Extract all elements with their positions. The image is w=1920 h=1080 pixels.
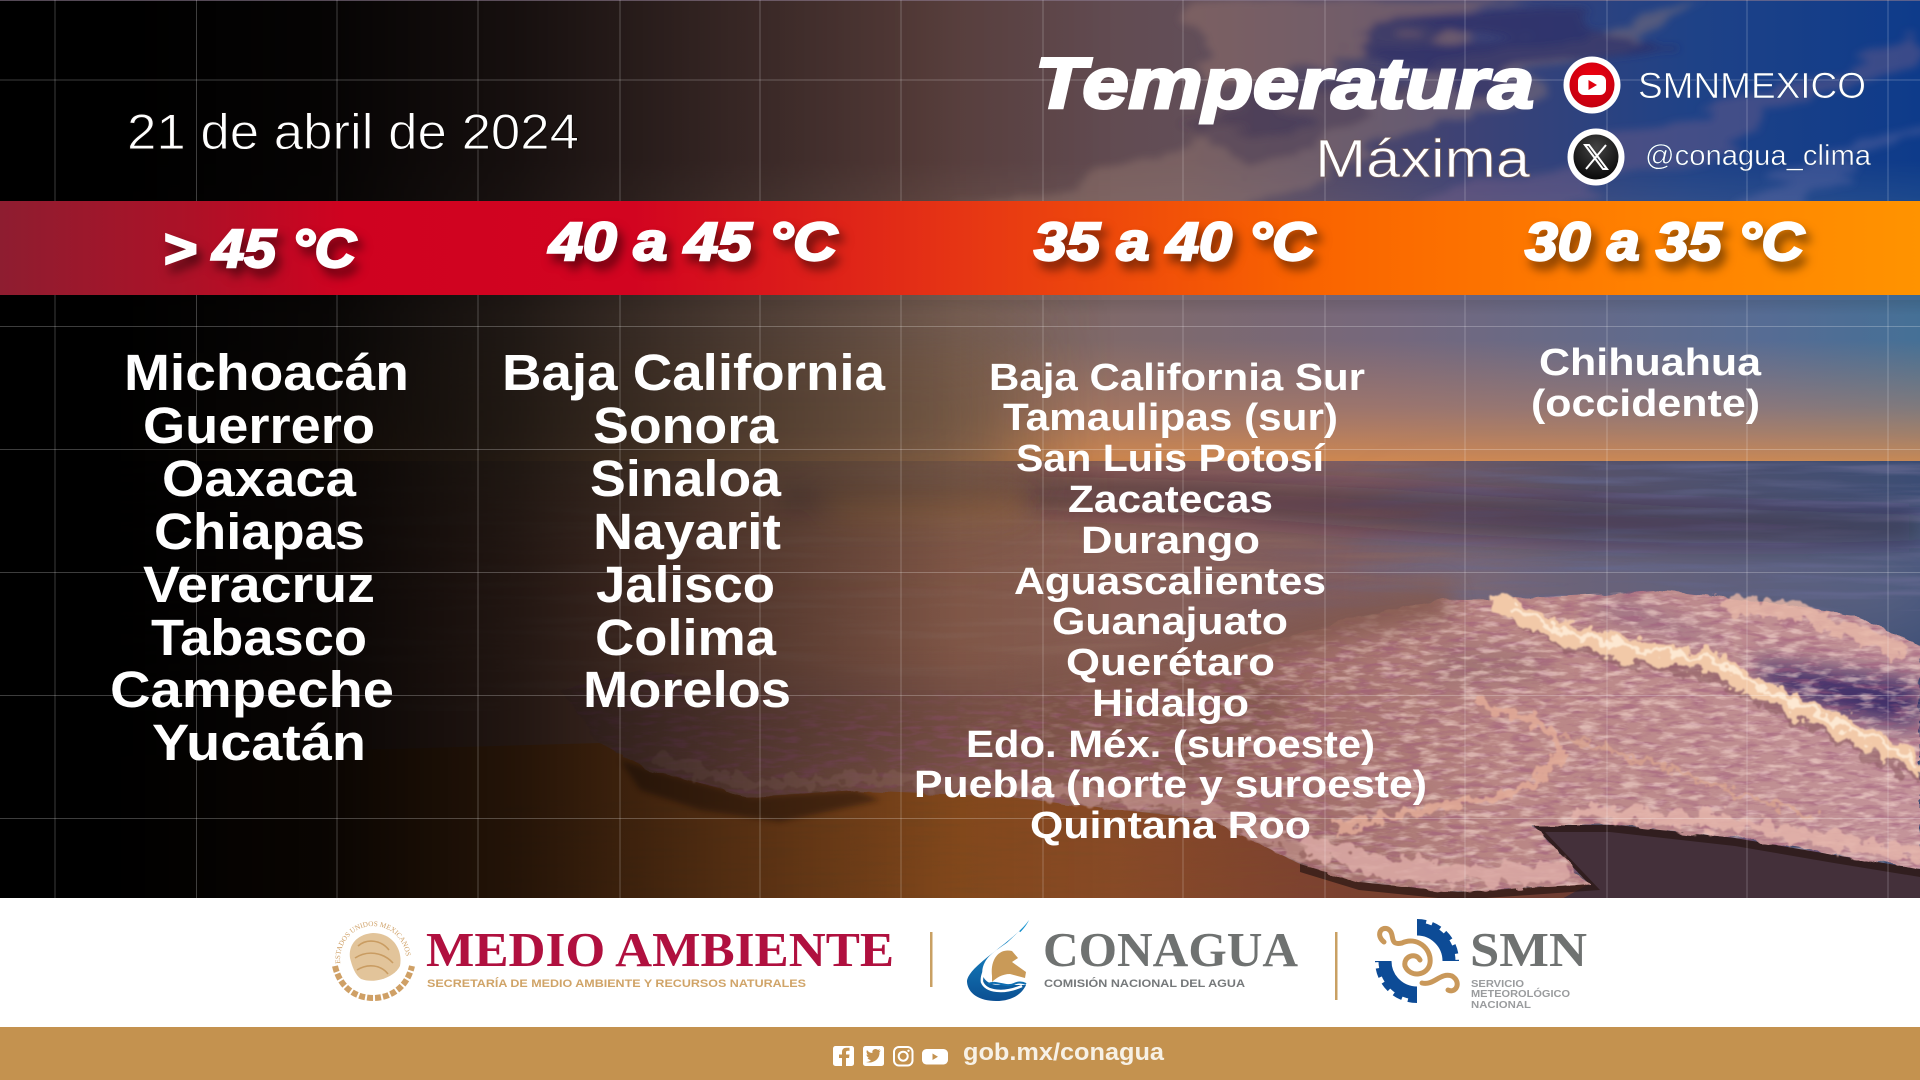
logo text: SMN: SMN bbox=[1470, 922, 1587, 977]
band label: above 45: > 45 °C bbox=[163, 219, 357, 279]
band label: 30 to 35: 30 a 35 °C bbox=[1525, 212, 1805, 272]
date: 21 de abril de 2024 bbox=[127, 104, 579, 160]
temperature band bbox=[0, 201, 1920, 295]
list: 35 to 40: Puebla (norte y suroeste) bbox=[914, 764, 1427, 806]
list: 30 to 35 bbox=[1531, 342, 1762, 425]
list: 35 to 40: Querétaro bbox=[1066, 642, 1275, 684]
list: 40 to 45: Jalisco bbox=[596, 556, 775, 613]
list: above 45: Guerrero bbox=[143, 397, 375, 454]
social: YouTube bbox=[1564, 56, 1866, 114]
website: gob.mx/conagua bbox=[963, 1039, 1165, 1066]
list: 40 to 45: Colima bbox=[595, 609, 777, 666]
list: 35 to 40: Guanajuato bbox=[1052, 601, 1288, 643]
social: X: @conagua_clima bbox=[1645, 140, 1872, 172]
sand and wet shore bbox=[0, 743, 1920, 900]
icon: facebook bbox=[833, 1046, 854, 1066]
list: 35 to 40: San Luis Potosí bbox=[1016, 438, 1326, 480]
list: 35 to 40 bbox=[914, 357, 1427, 847]
icon: twitter bbox=[863, 1046, 884, 1066]
list: 35 to 40: Tamaulipas (sur) bbox=[1003, 397, 1338, 439]
list: above 45: Veracruz bbox=[143, 556, 375, 613]
social: X bbox=[1568, 128, 1872, 186]
footer: gold bar bbox=[0, 1027, 1920, 1080]
list: above 45: Chiapas bbox=[154, 503, 365, 560]
list: 35 to 40: Zacatecas bbox=[1068, 479, 1273, 521]
logo text: SMN bbox=[1470, 922, 1587, 1011]
list: 35 to 40: Durango bbox=[1081, 520, 1260, 562]
list: above 45: Yucatán bbox=[152, 714, 366, 771]
foam bbox=[560, 590, 1920, 892]
logo: SMN gear and spiral bbox=[1378, 922, 1457, 1000]
list: 40 to 45: Baja California bbox=[502, 344, 886, 401]
list: 30 to 35: Chihuahua bbox=[1539, 342, 1762, 384]
footer: logo strip bbox=[0, 898, 1920, 1027]
list: 40 to 45: Sinaloa bbox=[590, 450, 782, 507]
logo: national seal: ESTADOS UNIDOS MEXICANOS bbox=[335, 921, 411, 964]
icon: youtube bbox=[922, 1049, 948, 1064]
social: YouTube: SMNMEXICO bbox=[1638, 65, 1866, 106]
list: above 45: Tabasco bbox=[151, 609, 367, 666]
band label: 35 to 40: 35 a 40 °C bbox=[1034, 212, 1316, 272]
logo text: SMN: SERVICIO bbox=[1471, 978, 1524, 990]
logo: national seal bbox=[332, 921, 415, 1001]
list: above 45 bbox=[110, 344, 409, 771]
list: 35 to 40: Edo. Méx. (suroeste) bbox=[966, 724, 1375, 766]
horizon haze on the left bbox=[380, 330, 1020, 500]
logo text: Medio Ambiente: MEDIO AMBIENTE bbox=[426, 922, 894, 977]
list: 35 to 40: Hidalgo bbox=[1092, 683, 1249, 725]
list: 35 to 40: Baja California Sur bbox=[989, 357, 1365, 399]
logo text: Conagua: COMISIÓN NACIONAL DEL AGUA bbox=[1044, 977, 1245, 990]
title: Temperatura Máxima: Temperatura bbox=[1035, 45, 1534, 124]
list: above 45: Michoacán bbox=[124, 344, 409, 401]
list: above 45: Oaxaca bbox=[162, 450, 357, 507]
logo text: SMN: METEOROLÓGICO bbox=[1471, 987, 1570, 1000]
rolling wave band at the horizon bbox=[780, 476, 1920, 543]
list: 40 to 45: Sonora bbox=[593, 397, 779, 454]
title: Temperatura Máxima: Máxima bbox=[1315, 129, 1531, 189]
list: 40 to 45 bbox=[502, 344, 886, 718]
logo text: Conagua: CONAGUA bbox=[1043, 922, 1299, 977]
list: above 45: Campeche bbox=[110, 661, 394, 718]
list: 40 to 45: Morelos bbox=[583, 661, 791, 718]
band label: 40 to 45: 40 a 45 °C bbox=[548, 212, 838, 272]
list: 35 to 40: Aguascalientes bbox=[1014, 561, 1326, 603]
list: 35 to 40: Quintana Roo bbox=[1030, 805, 1311, 847]
logo text: SMN: NACIONAL bbox=[1471, 999, 1532, 1011]
list: 40 to 45: Nayarit bbox=[593, 503, 781, 560]
logo text: Medio Ambiente: SECRETARÍA DE MEDIO AMBIENTE Y RECURSOS NATURALES bbox=[427, 977, 806, 990]
title: Temperatura Máxima bbox=[1035, 45, 1534, 189]
list: 30 to 35: (occidente) bbox=[1531, 383, 1760, 425]
icon: instagram bbox=[894, 1047, 912, 1066]
logo: Conagua drop bbox=[967, 920, 1029, 1001]
